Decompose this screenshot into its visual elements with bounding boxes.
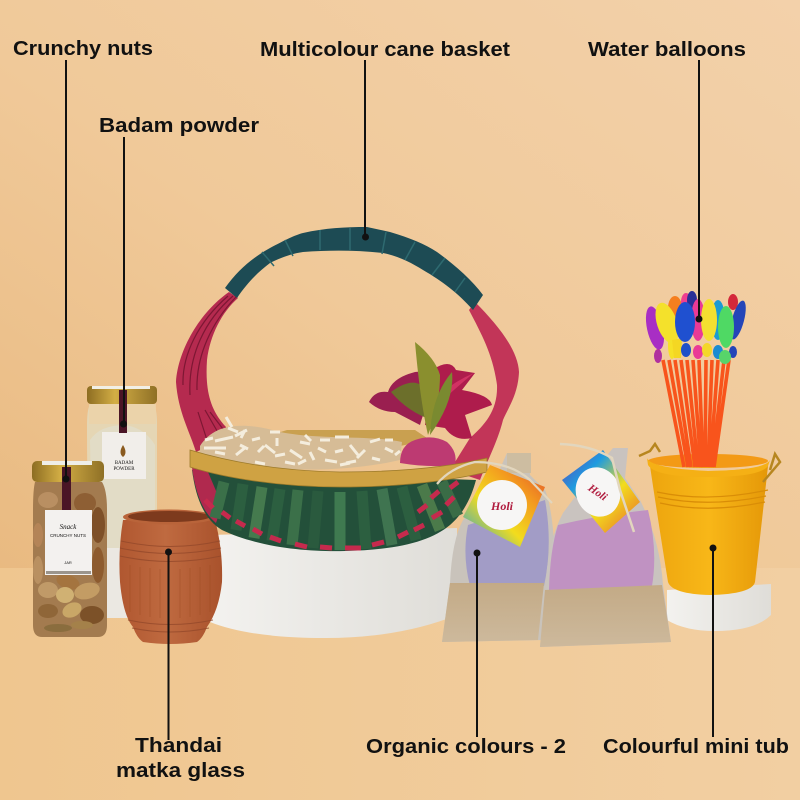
colourful mini tub	[639, 444, 780, 595]
handle texture	[262, 228, 465, 292]
callout: crunchy nuts: Crunchy nuts	[13, 38, 153, 60]
callout: thandai matka glass: matka glass	[116, 760, 245, 782]
balloons: front row	[643, 299, 749, 364]
tub handles	[639, 444, 780, 482]
burlap	[540, 585, 671, 647]
straws	[663, 360, 729, 467]
tub ridges	[657, 490, 768, 508]
background wall	[0, 0, 800, 569]
water balloons	[643, 291, 749, 467]
organic colours bag: left: Holi	[490, 499, 514, 513]
label: crunchy nuts jar	[45, 510, 92, 575]
organic colours bag: left	[437, 453, 556, 642]
callout: water balloons	[588, 39, 746, 322]
tub rim	[647, 458, 770, 477]
balloons: back row	[668, 291, 738, 359]
basket body	[192, 470, 476, 551]
basket strap: left	[176, 292, 238, 452]
callout: thandai matka glass	[116, 548, 245, 782]
tub interior	[648, 454, 768, 468]
callout: colourful mini tub: Colourful mini tub	[603, 736, 789, 758]
label: crunchy nuts jar: Snack	[60, 523, 77, 531]
handle wrap	[225, 227, 483, 310]
tag	[463, 465, 545, 547]
burlap	[442, 583, 544, 642]
paper shreds	[200, 417, 402, 470]
label: badam powder jar	[102, 432, 146, 479]
nuts	[33, 492, 105, 632]
basket strap: right	[450, 302, 519, 480]
red strands at left of body	[192, 468, 222, 523]
crunchy nuts jar	[32, 461, 107, 637]
callout: organic colours: Organic colours - 2	[366, 736, 566, 758]
rose bud	[400, 437, 456, 466]
flower	[369, 342, 492, 439]
background floor	[0, 568, 800, 800]
basket strap strands	[183, 296, 236, 440]
callout: water balloons: Water balloons	[588, 39, 746, 61]
front rim	[190, 450, 487, 487]
callout: multicolour cane basket: Multicolour cane basket	[260, 39, 510, 61]
tub body	[650, 466, 768, 595]
callout: badam powder	[99, 115, 259, 428]
label: crunchy nuts jar: CRUNCHY NUTS	[50, 533, 86, 538]
tag	[562, 450, 640, 533]
weave strips	[215, 482, 458, 550]
back rim	[268, 430, 430, 446]
callout: organic colours	[366, 550, 566, 758]
organic colours bag: right	[540, 444, 671, 647]
callout: crunchy nuts	[13, 38, 153, 482]
white pedestal under basket	[107, 528, 457, 638]
callout: colourful mini tub	[603, 544, 789, 758]
callout: thandai matka glass: Thandai	[135, 735, 222, 757]
callout: multicolour cane basket	[260, 39, 510, 240]
organic colours bag: right: Holi	[585, 482, 610, 504]
multicolour cane basket	[176, 227, 519, 551]
label: badam powder jar: BADAM	[115, 461, 134, 466]
callout: badam powder: Badam powder	[99, 115, 259, 137]
white pedestal under tub	[667, 584, 771, 631]
matka glass	[119, 510, 222, 644]
label: badam powder jar: POWDER	[113, 467, 135, 472]
badam powder jar	[87, 386, 157, 548]
red weave dashes	[205, 482, 458, 548]
label: crunchy nuts jar: JAR	[64, 560, 72, 565]
